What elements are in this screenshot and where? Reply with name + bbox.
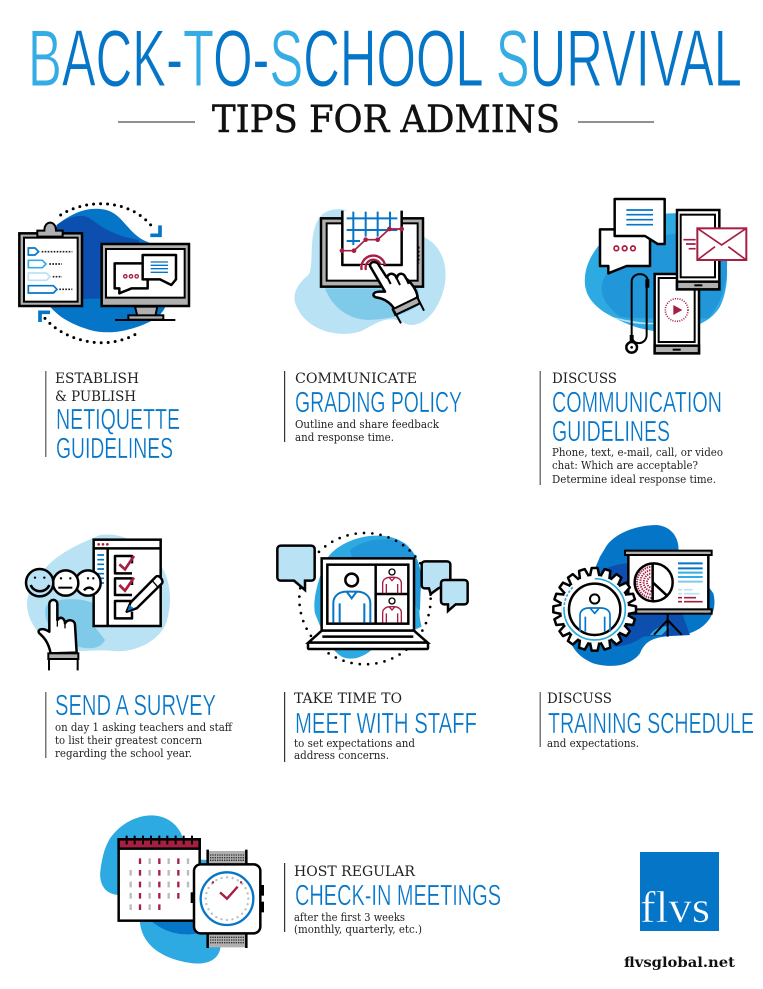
icon: clipboard and monitor [19, 204, 189, 343]
heading: netiquette: NETIQUETTE [56, 404, 180, 436]
heading: check-in meetings: CHECK-IN MEETINGS [295, 880, 501, 912]
heading: communication guidelines: GUIDELINES [552, 416, 670, 448]
icon: survey and faces [26, 534, 170, 670]
heading: send a survey: to list their greatest concern [55, 734, 202, 747]
heading: grading policy: and response time. [295, 431, 394, 444]
logo: flvs: flvs [640, 883, 710, 932]
heading: grading policy [284, 371, 462, 444]
logo: flvs [640, 852, 719, 932]
heading: check-in meetings: (monthly, quarterly, etc.) [294, 923, 422, 936]
heading: meet with staff [284, 691, 477, 762]
heading: send a survey [45, 690, 233, 760]
heading: meet with staff: to set expectations and [294, 737, 415, 750]
heading: grading policy: GRADING POLICY [295, 387, 462, 419]
heading: training schedule: and expectations. [547, 737, 639, 750]
heading: netiquette: & PUBLISH [55, 389, 136, 405]
heading: meet with staff: MEET WITH STAFF [295, 708, 477, 740]
heading: netiquette [45, 371, 180, 465]
heading: meet with staff: address concerns. [294, 749, 389, 762]
heading: check-in meetings: HOST REGULAR [294, 864, 415, 880]
icon: devices and speech bubbles [585, 199, 746, 353]
heading: netiquette: ESTABLISH [55, 371, 139, 387]
icon: calendar and watch [100, 815, 264, 964]
heading: meet with staff: TAKE TIME TO [294, 691, 402, 707]
heading: communication guidelines [540, 371, 723, 486]
website url: flvsglobal.net [624, 955, 736, 971]
heading: training schedule [540, 691, 754, 750]
heading: check-in meetings [284, 863, 501, 936]
subtitle: TIPS FOR ADMINS [212, 98, 560, 141]
heading: send a survey: regarding the school year. [55, 747, 192, 760]
heading: grading policy: COMMUNICATE [295, 371, 417, 387]
heading: communication guidelines: Determine ideal response time. [552, 473, 716, 486]
icon: tablet with chart [294, 209, 446, 334]
heading: send a survey: on day 1 asking teachers and staff [55, 721, 233, 734]
heading: grading policy: Outline and share feedback [295, 418, 439, 431]
heading: check-in meetings: after the first 3 weeks [294, 911, 405, 924]
icon: laptop video meeting [277, 533, 468, 664]
heading: send a survey: SEND A SURVEY [55, 690, 216, 722]
icon: gear and presentation [553, 525, 714, 666]
heading: communication guidelines: chat: Which are acceptable? [552, 459, 698, 472]
heading: netiquette: GUIDELINES [56, 433, 173, 465]
heading: communication guidelines: Phone, text, e-mail, call, or video [552, 446, 723, 459]
heading: communication guidelines: DISCUSS [552, 371, 617, 387]
heading: training schedule: DISCUSS [547, 691, 612, 707]
